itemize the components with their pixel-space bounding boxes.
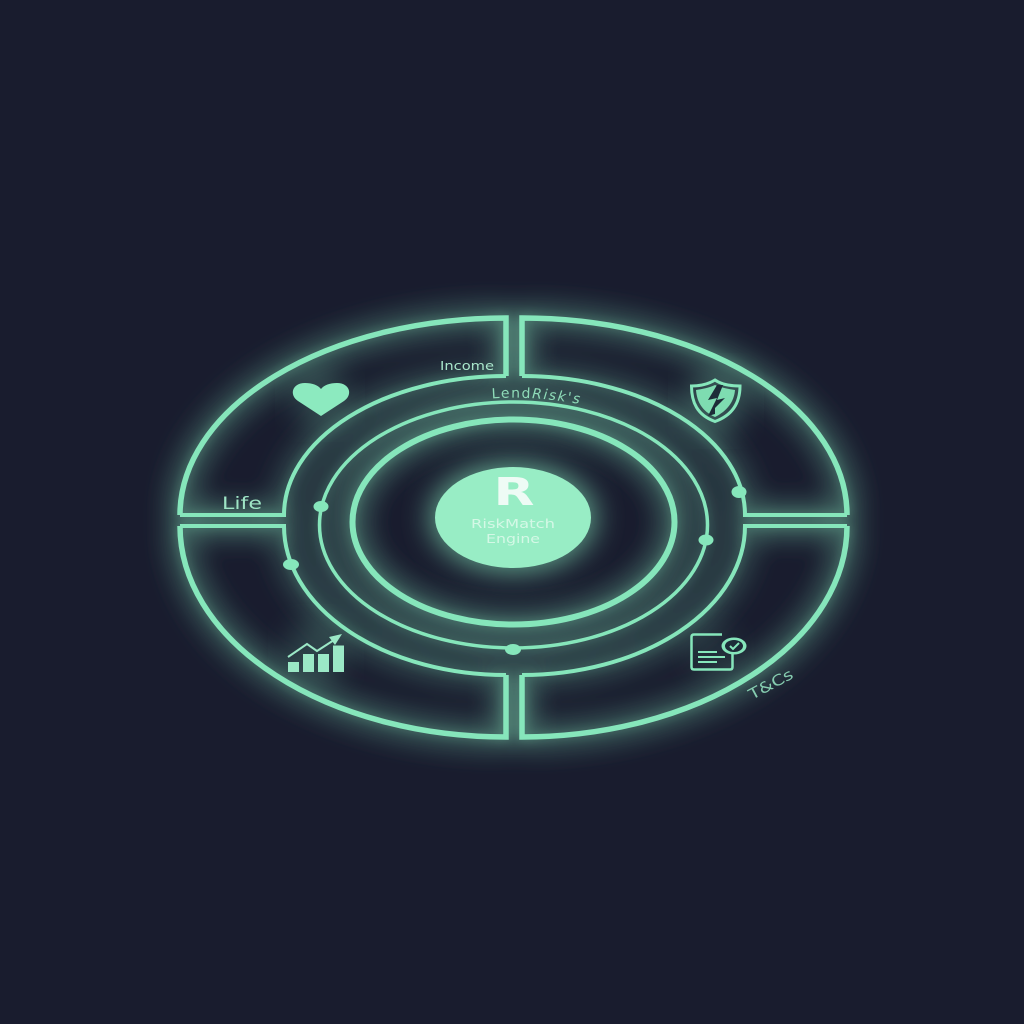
hub label: RiskMatch (471, 516, 555, 531)
connector nodes (283, 486, 746, 655)
label: Income: Income (440, 359, 494, 373)
icon: shield with bolt (692, 380, 740, 422)
center hub (435, 467, 591, 568)
icon: rising bar chart (288, 634, 344, 672)
label: Life: Life (222, 494, 262, 513)
glow layers (180, 318, 847, 737)
label: LendRisk's: LendRisk's (492, 387, 580, 404)
icon: document with check (692, 634, 746, 670)
icon: heart (293, 383, 349, 416)
hub label second line: Engine (486, 531, 540, 546)
quadrant panels and rings (180, 318, 847, 737)
label: T&Cs: T&Cs (744, 665, 796, 704)
hub letter: R (494, 470, 534, 514)
